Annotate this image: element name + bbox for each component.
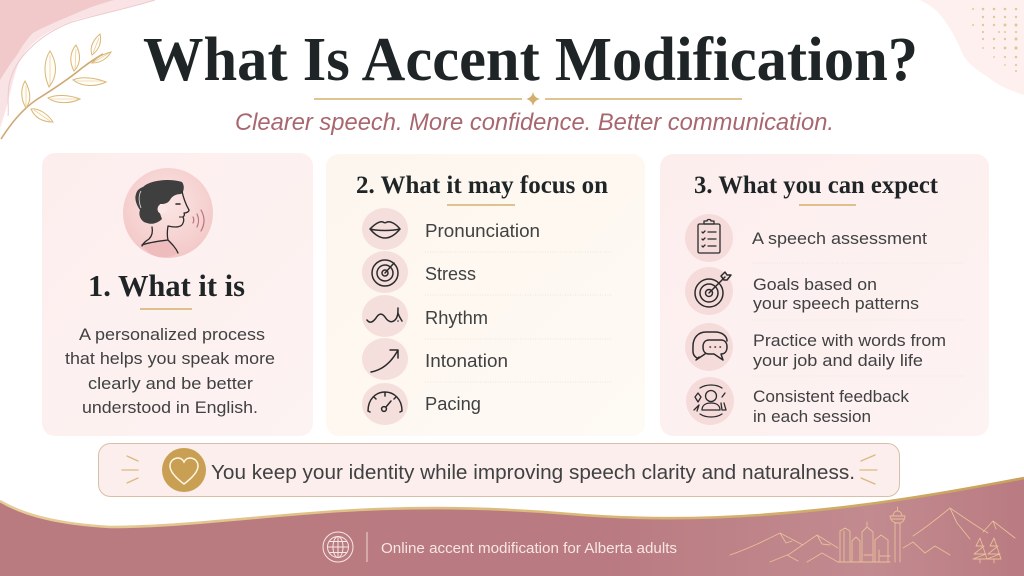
heading: 3. What you can expect bbox=[694, 172, 939, 199]
item: practice: Practice with words from bbox=[753, 331, 946, 350]
icon: Calgary skyline and mountains bbox=[730, 507, 1015, 563]
item: speech assessment: A speech assessment bbox=[752, 229, 927, 248]
footer band bbox=[0, 478, 1024, 576]
item: feedback: in each session bbox=[753, 407, 871, 426]
background: top-left pink blob bbox=[0, 0, 155, 128]
title divider with diamond bbox=[314, 92, 742, 106]
item: pronunciation bbox=[362, 208, 540, 250]
item: rhythm: Rhythm bbox=[425, 308, 488, 328]
panel 3: what you can expect bbox=[660, 154, 989, 436]
item: feedback bbox=[686, 377, 909, 426]
item: feedback: Consistent feedback bbox=[753, 387, 909, 406]
heading: 2. What it may focus on bbox=[356, 172, 608, 199]
item: goals: your speech patterns bbox=[753, 294, 919, 313]
banner message: You keep your identity while improving speech clarity and naturalness. bbox=[211, 462, 855, 484]
item: stress bbox=[362, 251, 476, 293]
icon: gold laurel branch bbox=[1, 34, 111, 139]
body text: understood in English. bbox=[82, 398, 258, 417]
body text: that helps you speak more bbox=[65, 349, 275, 368]
item: pacing bbox=[362, 383, 481, 425]
background: top-right blob with dots bbox=[920, 0, 1024, 95]
item: pronunciation: Pronunciation bbox=[425, 221, 540, 241]
item: intonation bbox=[362, 338, 508, 380]
footer text: Online accent modification for Alberta adults bbox=[381, 540, 677, 557]
icon: speaking woman profile bbox=[123, 168, 213, 258]
item: pacing: Pacing bbox=[425, 394, 481, 414]
item: goals: Goals based on bbox=[753, 275, 877, 294]
icon: heart in gold circle bbox=[162, 448, 206, 492]
panel 2: what it may focus on bbox=[326, 154, 645, 436]
subtitle: Clearer speech. More confidence. Better communication. bbox=[235, 109, 834, 136]
body text bbox=[65, 325, 275, 417]
body text: A personalized process bbox=[79, 325, 265, 344]
item: speech assessment bbox=[685, 214, 927, 262]
item: rhythm bbox=[362, 295, 488, 337]
icon: globe bbox=[323, 532, 353, 562]
body text: clearly and be better bbox=[88, 374, 253, 393]
item: practice: your job and daily life bbox=[753, 351, 923, 370]
item: stress: Stress bbox=[425, 264, 476, 284]
heading: 1. What it is bbox=[88, 268, 245, 303]
identity banner bbox=[98, 444, 900, 496]
panel 1: what it is bbox=[42, 153, 313, 436]
item: intonation: Intonation bbox=[425, 351, 508, 371]
item: practice bbox=[685, 323, 946, 371]
title: What Is Accent Modification? bbox=[143, 26, 918, 94]
item: goals bbox=[685, 267, 919, 315]
